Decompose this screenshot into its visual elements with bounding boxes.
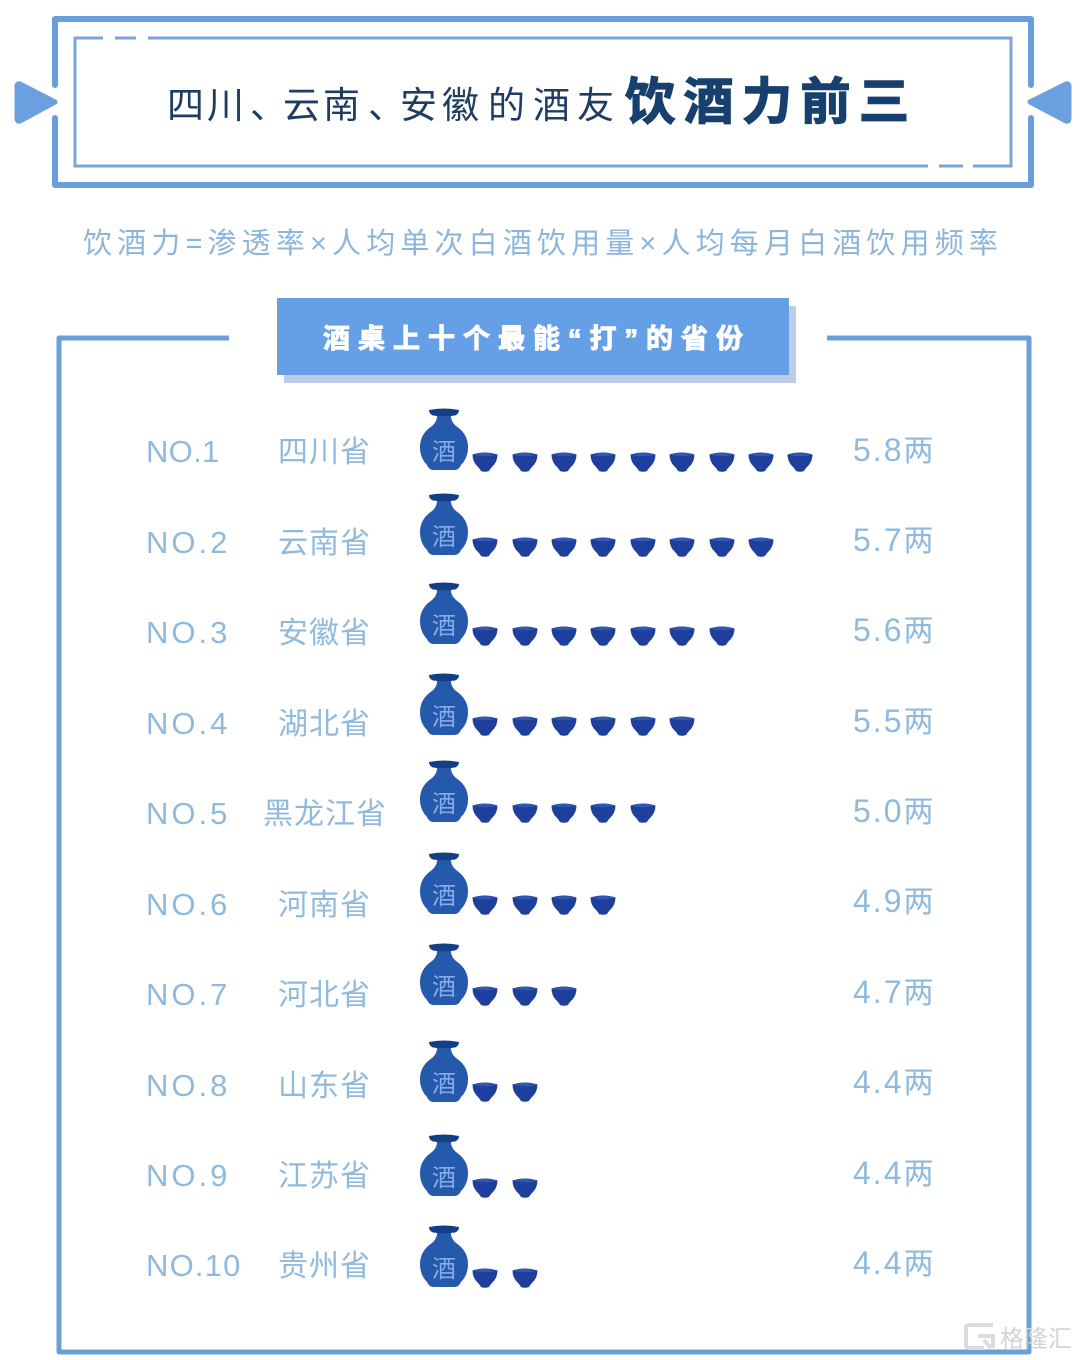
row 8: 4.4两: [853, 1064, 935, 1100]
row 5: 5.0两: [853, 793, 935, 829]
cups: 7: [472, 626, 734, 646]
row 6: 河南省: [278, 889, 371, 922]
icon: bottle: [420, 408, 468, 470]
row 1: 5.8两: [853, 432, 935, 468]
row 9: NO.9: [146, 1158, 230, 1193]
ranking panel frame: [59, 338, 1029, 1352]
cups: 9: [472, 452, 812, 472]
row 7: [146, 944, 935, 1012]
row 4: NO.4: [146, 706, 230, 741]
row 7: NO.7: [146, 977, 230, 1012]
watermark: 格隆汇: [1000, 1326, 1072, 1353]
row 4: 湖北省: [278, 708, 371, 741]
row 1: 四川省: [278, 436, 371, 469]
row 9: 江苏省: [278, 1160, 371, 1193]
row 2: 云南省: [278, 527, 371, 560]
cups: 3: [472, 986, 576, 1006]
row 3: 安徽省: [278, 617, 371, 650]
row 8: NO.8: [146, 1068, 230, 1103]
row 4: 5.5两: [853, 703, 935, 739]
row 3: [146, 582, 935, 650]
icon: bottle: 酒: [432, 439, 456, 466]
icon: bottle: 酒: [432, 883, 456, 910]
row 7: 河北省: [278, 979, 371, 1012]
cups: 2: [472, 1082, 538, 1102]
icon: bottle: [420, 944, 468, 1005]
banner text: 酒桌上十个最能“打”的省份: [323, 324, 751, 354]
banner: [277, 298, 796, 383]
icon: left arrow: [17, 84, 55, 121]
icon: bottle: 酒: [432, 704, 456, 731]
cups: 6: [472, 716, 694, 736]
row 6: 4.9两: [853, 883, 935, 919]
inner frame: [75, 38, 1011, 166]
icon: bottle: [420, 852, 468, 914]
cups: 8: [472, 538, 774, 557]
icon: bottle: [420, 674, 468, 735]
cups: 4: [472, 896, 616, 915]
row 10: 4.4两: [853, 1245, 935, 1281]
row 6: [146, 852, 935, 922]
row 2: 5.7两: [853, 522, 935, 558]
row 5: 黑龙江省: [263, 798, 387, 831]
row 8: 山东省: [278, 1070, 371, 1103]
icon: bottle: 酒: [432, 1256, 456, 1283]
row 6: NO.6: [146, 887, 230, 922]
row 9: [146, 1134, 935, 1198]
formula: 饮酒力=渗透率×人均单次白酒饮用量×人均每月白酒饮用频率: [83, 227, 1003, 260]
row 10: [146, 1226, 935, 1288]
icon: bottle: 酒: [432, 791, 456, 818]
title frame: [55, 19, 1031, 185]
icon: bottle: [420, 1134, 468, 1196]
row 8: [146, 1040, 935, 1103]
row 10: NO.10: [146, 1248, 242, 1283]
icon: bottle: 酒: [432, 1165, 456, 1192]
row 7: 4.7两: [853, 974, 935, 1010]
row 1: NO.1: [146, 434, 220, 469]
row 3: 5.6两: [853, 612, 935, 648]
row 9: 4.4两: [853, 1155, 935, 1191]
icon: bottle: 酒: [432, 524, 456, 551]
cups: 5: [472, 804, 656, 823]
icon: right arrow: [1030, 84, 1069, 121]
icon: bottle: 酒: [432, 613, 456, 640]
row 10: 贵州省: [278, 1250, 371, 1283]
row 4: [146, 674, 935, 741]
row 2: NO.2: [146, 525, 230, 560]
icon: bottle: [420, 1040, 468, 1102]
icon: bottle: [420, 760, 468, 822]
title: 饮酒力前三: [625, 74, 918, 130]
watermark: [966, 1325, 1072, 1353]
row 1: [146, 408, 935, 472]
row 5: NO.5: [146, 796, 230, 831]
icon: bottle: 酒: [432, 1071, 456, 1098]
icon: watermark logo: [966, 1325, 993, 1348]
title: 四川、云南、安徽的酒友: [167, 85, 614, 126]
cups: 2: [472, 1178, 538, 1198]
row 3: NO.3: [146, 615, 230, 650]
row 5: [146, 760, 935, 831]
icon: bottle: [420, 494, 468, 555]
icon: bottle: [420, 582, 468, 644]
outer frame: [55, 19, 1031, 185]
icon: bottle: 酒: [432, 974, 456, 1001]
icon: bottle: [420, 1226, 468, 1287]
cups: 2: [472, 1268, 538, 1288]
row 2: [146, 494, 935, 560]
